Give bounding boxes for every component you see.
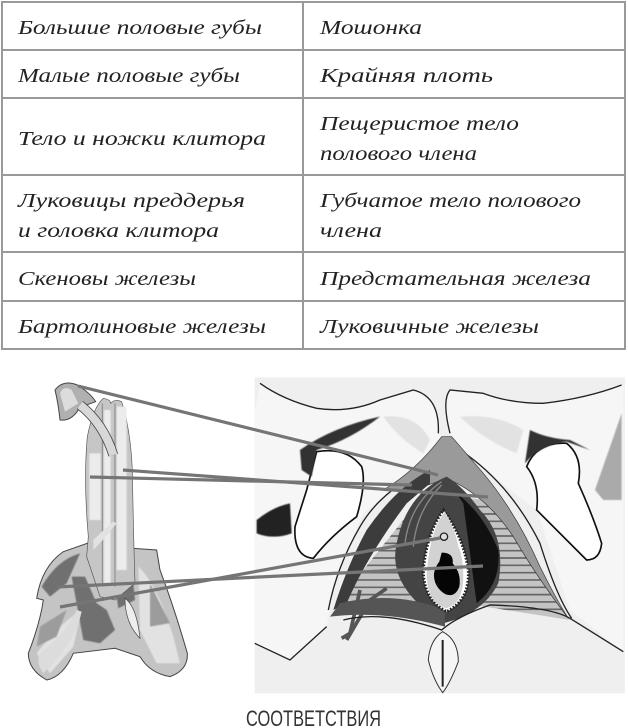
row 5 [18,268,591,290]
row 1 [17,17,422,39]
glans and urethra [55,383,96,420]
vaginal opening [423,510,468,612]
row 3: полового члена [320,143,477,165]
obturator foramina [295,451,363,558]
paper background [255,377,625,693]
row 3: Тело и ножки клитора [18,128,266,150]
row 3: Пещеристое тело [319,113,519,135]
row 4: Губчатое тело полового [319,190,581,212]
hatched perineal triangles [347,498,570,620]
row 4: Луковицы преддерья [17,190,245,212]
illustration: male anatomy [28,383,187,680]
central muscle oval [395,477,500,623]
shaded bone areas [257,413,622,537]
row 6: Луковичные железы [319,316,539,338]
row 1: Большие половые губы [17,17,262,39]
row 6: Бартолиновые железы [17,316,266,338]
row 2: Крайняя плоть [319,65,493,87]
corpora cavernosa and spongiosum [86,398,135,600]
anus [428,632,458,693]
row 2 [17,65,493,87]
row 2: Малые половые губы [17,65,240,87]
row 4 [17,190,581,242]
pelvic bones [255,383,623,660]
connector lines [57,386,488,607]
row 6 [17,316,539,338]
pelvic base [28,540,187,680]
table of correspondences [2,2,625,349]
row 5: Предстательная железа [319,268,591,290]
row 5: Скеновы железы [18,268,196,290]
illustration: female anatomy [255,377,625,693]
row 4: и головка клитора [18,220,219,242]
row 3 [18,113,519,165]
row 1: Мошонка [319,17,422,39]
row 4: члена [320,220,382,242]
clitoral crura [383,437,568,618]
